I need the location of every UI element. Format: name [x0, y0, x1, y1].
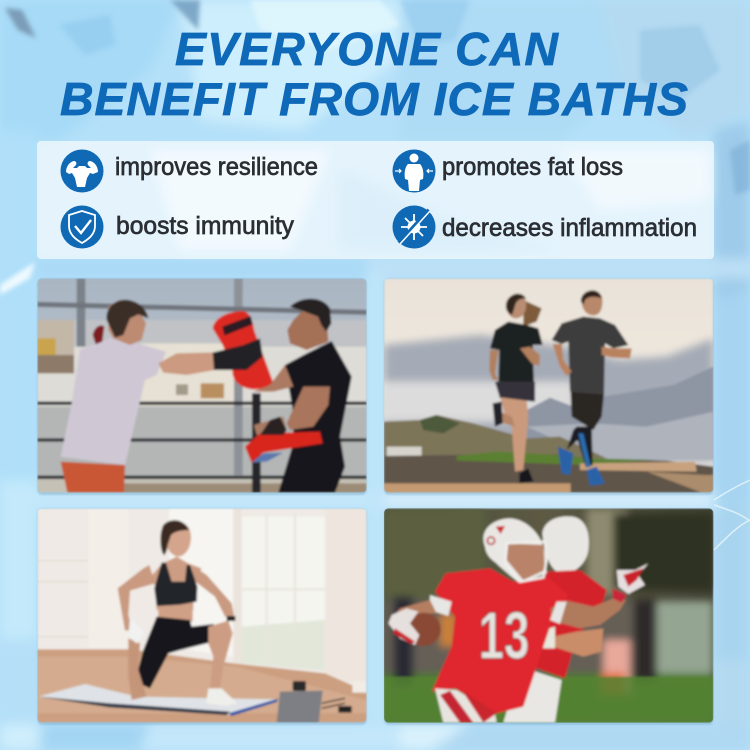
panel: benefits	[37, 141, 714, 259]
benefit: boosts immunity: boosts immunity	[116, 212, 294, 240]
icon: muscular torso	[60, 150, 104, 192]
man in black	[278, 341, 352, 493]
benefit: decreases inflammation: decreases inflammation	[442, 214, 697, 242]
back player	[542, 516, 589, 574]
photo: American football players	[384, 508, 713, 725]
title: EVERYONE CAN	[175, 23, 559, 75]
photo: couple running	[384, 278, 713, 495]
woman runner	[523, 300, 542, 327]
benefit: decreases inflammation	[392, 206, 697, 248]
title: BENEFIT FROM ICE BATHS	[60, 73, 688, 125]
red pad	[213, 311, 273, 389]
icon: shield with check	[60, 206, 104, 248]
benefit: promotes fat loss: promotes fat loss	[442, 153, 623, 181]
photo: boxing training	[37, 278, 367, 495]
jersey number: 13	[479, 599, 529, 673]
icon: body with inward arrows	[392, 150, 436, 192]
benefit: improves resilience: improves resilience	[115, 153, 318, 181]
yoga mat	[38, 684, 278, 715]
benefit: promotes fat loss	[392, 150, 623, 192]
front player	[432, 568, 568, 713]
photo: woman stretching at home	[37, 508, 367, 725]
laptop and bottle	[293, 681, 306, 691]
man runner	[582, 291, 602, 315]
man in white shirt	[61, 338, 166, 465]
benefit: improves resilience	[60, 150, 318, 192]
title	[60, 23, 688, 125]
icon: crossed-out virus	[392, 206, 436, 248]
woman	[165, 523, 191, 556]
benefit: boosts immunity	[60, 206, 294, 248]
